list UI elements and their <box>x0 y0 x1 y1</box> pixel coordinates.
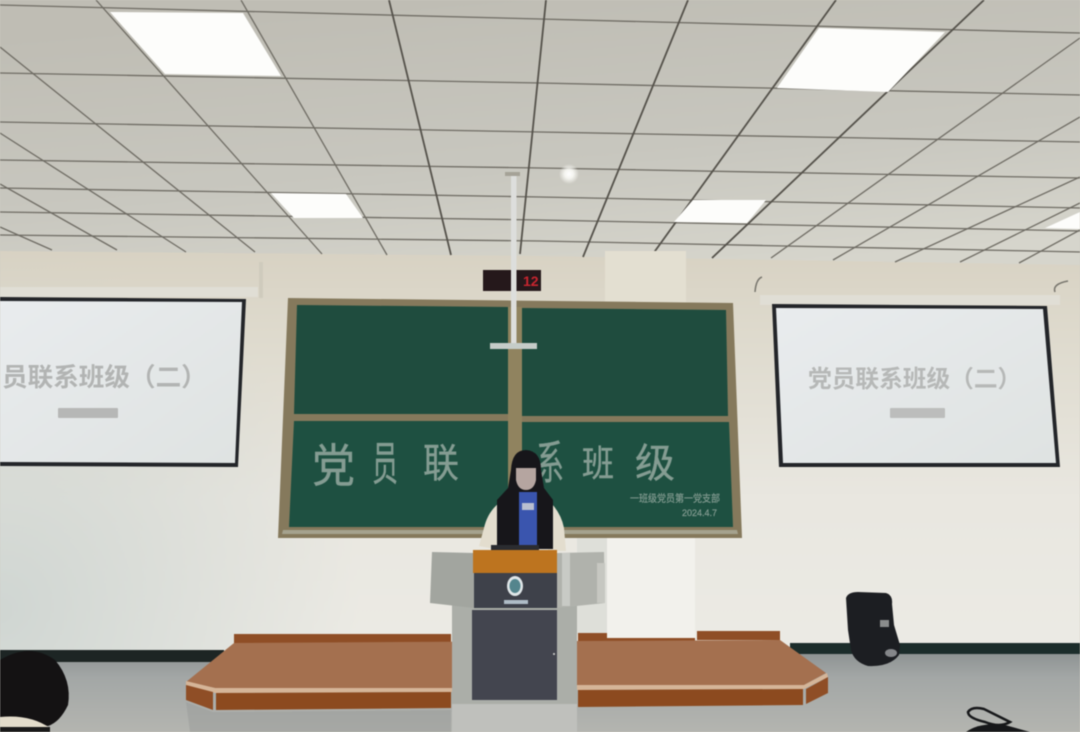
chalk heading <box>312 437 675 492</box>
wall column <box>577 251 695 639</box>
hair and vest <box>497 450 553 549</box>
ceiling lights <box>110 12 1080 229</box>
digital clock: 12 <box>523 273 539 289</box>
emblem <box>504 576 528 604</box>
chalk heading: 党 <box>312 440 355 492</box>
chalk signature: 一班级党员第一党支部 <box>630 492 720 505</box>
presenter tag <box>58 408 118 418</box>
wall <box>0 250 1080 662</box>
left projector screen <box>0 262 263 467</box>
chalk heading: 级 <box>635 442 675 486</box>
lectern <box>430 545 605 732</box>
lower wall skirting <box>0 643 1080 662</box>
chalk heading: 班 <box>582 443 614 484</box>
speaker person <box>479 450 566 551</box>
ceiling pole with crossbar <box>490 172 537 349</box>
lectern orange top <box>473 550 557 573</box>
screen title: 党员联系班级（二） <box>808 366 1021 393</box>
speaker <box>846 592 900 666</box>
audience head <box>0 651 69 732</box>
screen title: 员联系班级（二） <box>2 363 207 392</box>
right projector screen <box>755 277 1068 467</box>
ceiling <box>0 0 1080 265</box>
chalk date: 2024.4.7 <box>682 508 717 518</box>
presenter tag <box>890 408 945 418</box>
stage platform <box>186 631 828 732</box>
bag strap <box>966 708 1030 732</box>
chalk heading: 联 <box>423 442 459 486</box>
digital clock <box>483 270 541 291</box>
chalk heading: 系 <box>536 437 564 489</box>
floor <box>0 654 1080 732</box>
blue shirt <box>519 492 537 546</box>
chalk heading: 员 <box>372 438 398 490</box>
blackboard <box>278 298 742 538</box>
face <box>516 468 536 490</box>
jacket sleeves <box>479 500 503 550</box>
